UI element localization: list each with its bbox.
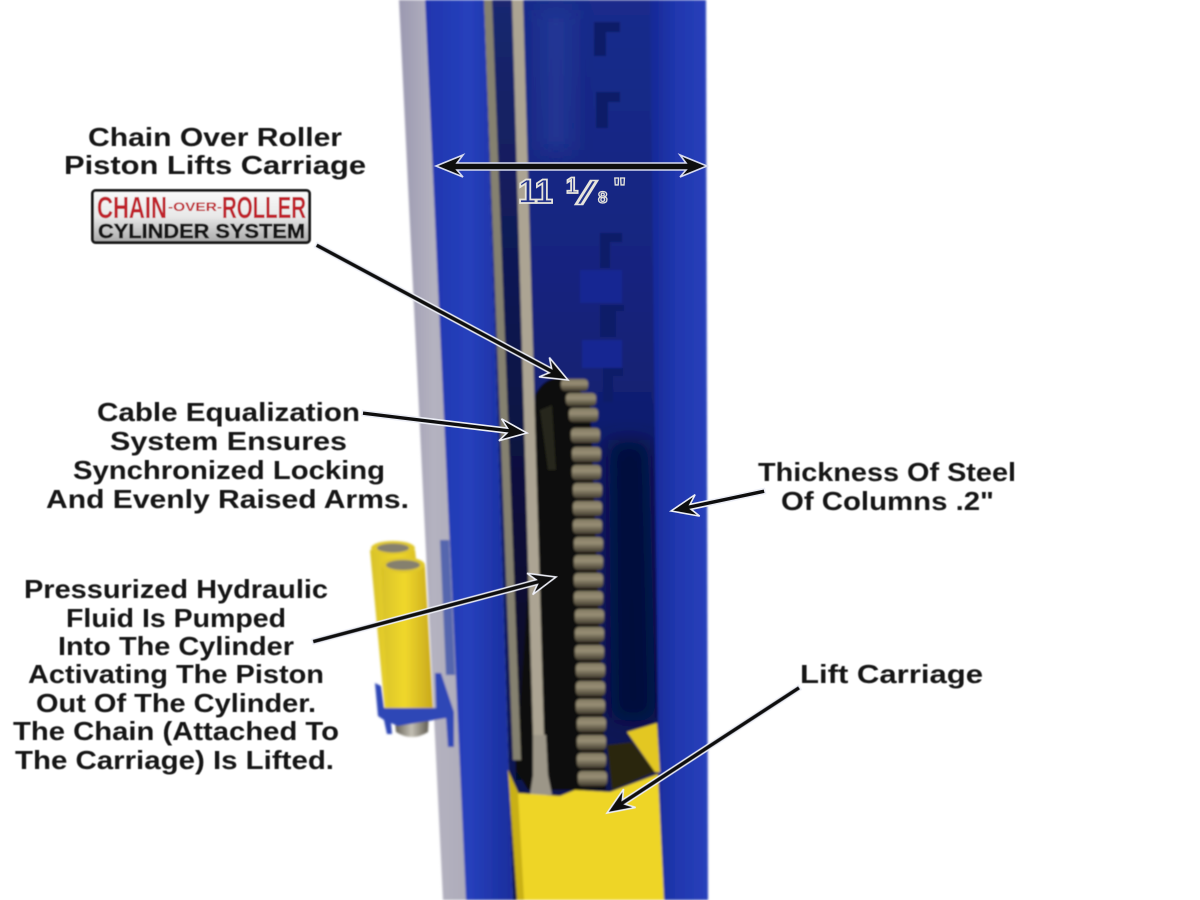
photo: lift column	[370, 0, 708, 900]
blue cylinder bracket	[375, 673, 454, 747]
arrow: logo to chain	[311, 235, 573, 390]
callout: pressurized hydraulic fluid: Out Of The Cylinder.	[36, 688, 316, 718]
carriage left edge	[508, 770, 524, 900]
logo: chain-over-roller cylinder system: -OVER-	[168, 200, 222, 214]
rack of lock notches	[594, 22, 624, 402]
callout: pressurized hydraulic fluid: The Carriage) Is Lifted.	[15, 745, 334, 775]
hydraulic base fitting	[394, 712, 429, 737]
dimension label: 11 1/8 inches	[518, 172, 626, 211]
soft interior lighting	[540, 10, 655, 720]
dimension label: 11 1/8 inches: "	[613, 172, 626, 203]
logo: chain-over-roller cylinder system: CYLINDER SYSTEM	[98, 221, 305, 243]
dimension label: 11 1/8 inches: 8	[598, 188, 607, 207]
yellow lift carriage	[508, 770, 664, 900]
callout: cable equalization: Cable Equalization	[97, 397, 360, 427]
carriage inner yellow	[627, 723, 660, 772]
yellow cylinder rear	[370, 541, 433, 712]
arrow: hydraulic fluid	[310, 566, 559, 652]
yellow cylinder front	[381, 557, 433, 712]
callout: pressurized hydraulic fluid	[13, 574, 339, 775]
heading: chain over roller: Chain Over Roller	[88, 122, 342, 152]
heading: chain over roller: Piston Lifts Carriage	[64, 150, 366, 180]
thick cable	[512, 0, 544, 735]
dimension label: 11 1/8 inches: /	[576, 175, 597, 211]
callout: pressurized hydraulic fluid: Pressurized Hydraulic	[24, 574, 328, 604]
column right blue flange	[650, 0, 708, 900]
plate highlight	[540, 405, 556, 470]
arrow: cable equalization	[361, 402, 528, 444]
callout: pressurized hydraulic fluid: Activating The Piston	[28, 659, 324, 689]
carriage opening shadow	[607, 742, 655, 790]
callout: thickness of steel	[758, 457, 1016, 516]
callout: cable equalization	[46, 397, 409, 514]
dimension label: 11 1/8 inches: 11	[518, 173, 553, 211]
arrow: thickness of steel	[669, 480, 767, 522]
interior shadow behind cables	[490, 0, 540, 780]
column grey side face	[399, 0, 467, 900]
logo: chain-over-roller cylinder system: ROLLER	[222, 190, 306, 225]
column left blue flange	[425, 0, 513, 900]
dimension label: 11 1/8 inches: 1	[566, 173, 578, 198]
rack lighter blocks	[580, 270, 622, 368]
callout: lift carriage: Lift Carriage	[800, 659, 983, 689]
callout: pressurized hydraulic fluid: The Chain (Attached To	[13, 716, 339, 746]
cable ferrule	[530, 735, 552, 795]
roller chain	[561, 379, 607, 786]
bracket vertical strip	[440, 540, 455, 675]
callout: cable equalization: System Ensures	[110, 426, 347, 456]
callout: thickness of steel: Of Columns .2"	[781, 486, 994, 516]
logo: chain-over-roller cylinder system: CHAIN	[97, 190, 167, 225]
arrow: lift carriage	[601, 678, 806, 822]
callout: cable equalization: Synchronized Locking	[73, 455, 385, 485]
black chain backing plate	[516, 378, 606, 790]
dimension arrow: column width	[436, 155, 707, 177]
thin cable	[484, 0, 521, 760]
heading: chain over roller	[64, 122, 366, 180]
callout: thickness of steel: Thickness Of Steel	[758, 457, 1016, 487]
callout: cable equalization: And Evenly Raised Arms.	[46, 484, 409, 514]
callout: pressurized hydraulic fluid: Into The Cylinder	[58, 631, 294, 661]
callout: pressurized hydraulic fluid: Fluid Is Pumped	[66, 603, 286, 633]
column interior channel	[484, 0, 660, 900]
logo: chain-over-roller cylinder system	[92, 190, 310, 243]
